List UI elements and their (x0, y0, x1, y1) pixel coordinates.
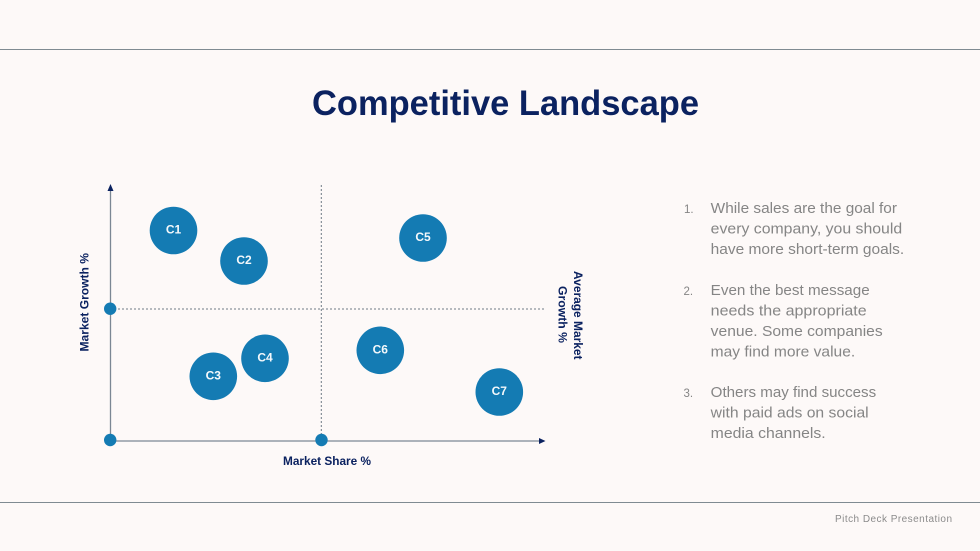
bubble C2: C2 (236, 253, 252, 267)
bubble C3 (190, 352, 237, 400)
list item 2: Even the best message (711, 282, 870, 299)
average growth label: Average Market (571, 271, 585, 360)
bubble C4: C4 (257, 350, 273, 364)
list item 2 (684, 282, 883, 360)
list item 3: media channels. (711, 425, 826, 442)
average growth label (556, 271, 585, 360)
list item 1: 1. (684, 204, 694, 216)
numbered list (684, 200, 904, 442)
x axis (110, 438, 546, 444)
list item 3 (684, 384, 876, 442)
list item 2: venue. Some companies (711, 323, 883, 340)
list item 1: While sales are the goal for (711, 200, 897, 217)
bubble C4 (241, 334, 289, 382)
bubble C7: C7 (492, 384, 507, 398)
average growth label: Growth % (556, 286, 570, 343)
bubble C5: C5 (415, 230, 431, 244)
bubble C3: C3 (206, 368, 221, 382)
axis marker dots (104, 302, 328, 446)
title: Competitive Landscape (312, 84, 699, 123)
list item 2: needs the appropriate (711, 302, 867, 319)
y axis label: Market Growth % (78, 253, 92, 352)
list item 2: may find more value. (711, 343, 855, 360)
list item 3: Others may find success (711, 384, 876, 401)
bubble C7 (476, 368, 523, 416)
list item 1: have more short-term goals. (711, 241, 904, 258)
y axis (108, 184, 114, 441)
bubble C6 (356, 326, 404, 374)
list item 2: 2. (684, 286, 693, 298)
list item 3: with paid ads on social (710, 404, 869, 421)
x axis label: Market Share % (283, 454, 371, 468)
bubble C1 (150, 207, 197, 254)
footer label: Pitch Deck Presentation (835, 514, 952, 525)
chart: competitive matrix (78, 184, 585, 468)
bubble C6: C6 (373, 342, 388, 356)
list item 1 (684, 200, 904, 258)
bubble C2 (220, 237, 268, 285)
list item 1: every company, you should (711, 220, 902, 237)
bubble C1: C1 (166, 222, 181, 236)
bubble C5 (399, 214, 447, 262)
list item 3: 3. (684, 388, 693, 400)
